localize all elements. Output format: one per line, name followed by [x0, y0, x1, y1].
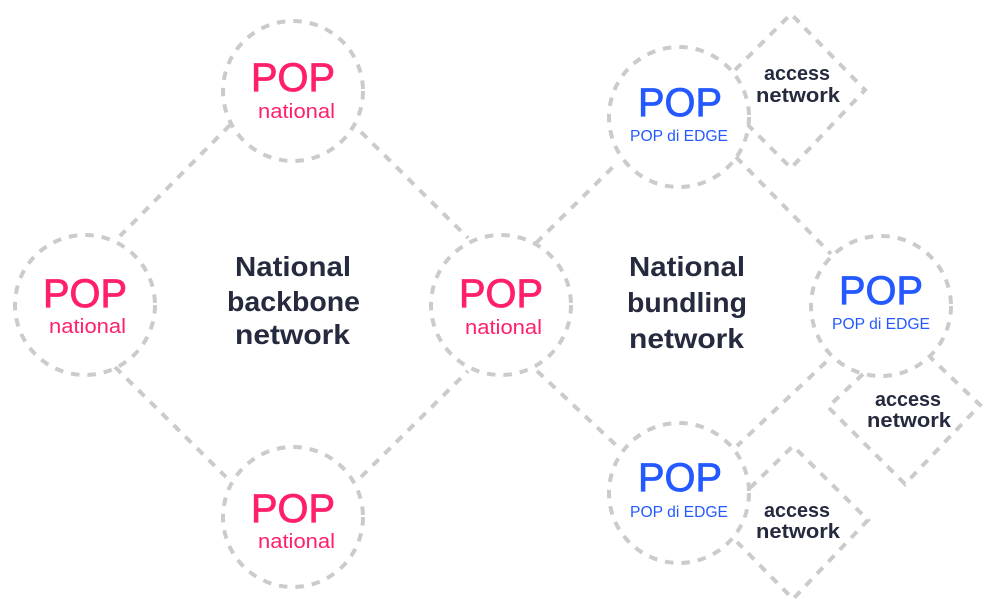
access network diamond: upper: network — [756, 85, 841, 107]
heading: National bundling network: network — [629, 323, 744, 354]
POP national: top — [223, 21, 363, 161]
POP di EDGE: lower — [609, 423, 749, 563]
access network diamond: right: access — [875, 389, 941, 411]
POP national: center — [431, 235, 571, 375]
heading: National bundling network — [627, 251, 747, 354]
POP di EDGE: right: POP di EDGE — [832, 316, 930, 333]
POP di EDGE: upper: POP di EDGE — [630, 128, 728, 145]
bundling link: upper edge to right edge — [736, 157, 831, 254]
POP national: center: national — [465, 317, 542, 339]
POP di EDGE: upper — [609, 47, 749, 187]
backbone link: top to left — [120, 125, 230, 236]
access network diamond: lower — [737, 446, 868, 599]
POP di EDGE: lower: POP di EDGE — [630, 504, 728, 521]
heading: National backbone network: National — [235, 251, 351, 282]
access network diamond: upper: access — [764, 63, 830, 85]
POP national: left — [15, 235, 155, 375]
bundling link: center to lower edge — [537, 371, 617, 446]
heading: National bundling network: bundling — [627, 287, 747, 318]
access network diamond: right — [828, 357, 980, 484]
backbone link: bottom to center — [361, 371, 468, 477]
access network diamond: right: network — [867, 410, 952, 432]
access network diamond: lower: network — [756, 521, 841, 543]
POP national: center: POP — [459, 272, 543, 316]
backbone link: top to center — [361, 132, 468, 238]
POP national: bottom — [223, 447, 363, 587]
heading: National bundling network: National — [629, 251, 745, 282]
backbone link: left to bottom — [115, 367, 226, 477]
access network diamond: upper — [735, 14, 865, 168]
bundling link: center to upper edge — [536, 163, 617, 243]
POP di EDGE: lower: POP — [638, 456, 722, 500]
POP national: bottom: national — [258, 531, 335, 553]
POP di EDGE: upper: POP — [638, 81, 722, 125]
POP di EDGE: right: POP — [839, 269, 923, 313]
heading: National backbone network: backbone — [227, 286, 360, 317]
heading: National backbone network — [227, 251, 360, 350]
POP national: left: POP — [43, 272, 127, 316]
POP national: top: POP — [251, 56, 335, 100]
POP national: left: national — [49, 316, 126, 338]
POP national: bottom: POP — [251, 487, 335, 531]
bundling link: right edge to lower edge — [737, 362, 826, 446]
POP di EDGE: right — [811, 236, 951, 376]
POP national: top: national — [258, 101, 335, 123]
heading: National backbone network: network — [235, 319, 350, 350]
access network diamond: lower: access — [764, 500, 830, 522]
